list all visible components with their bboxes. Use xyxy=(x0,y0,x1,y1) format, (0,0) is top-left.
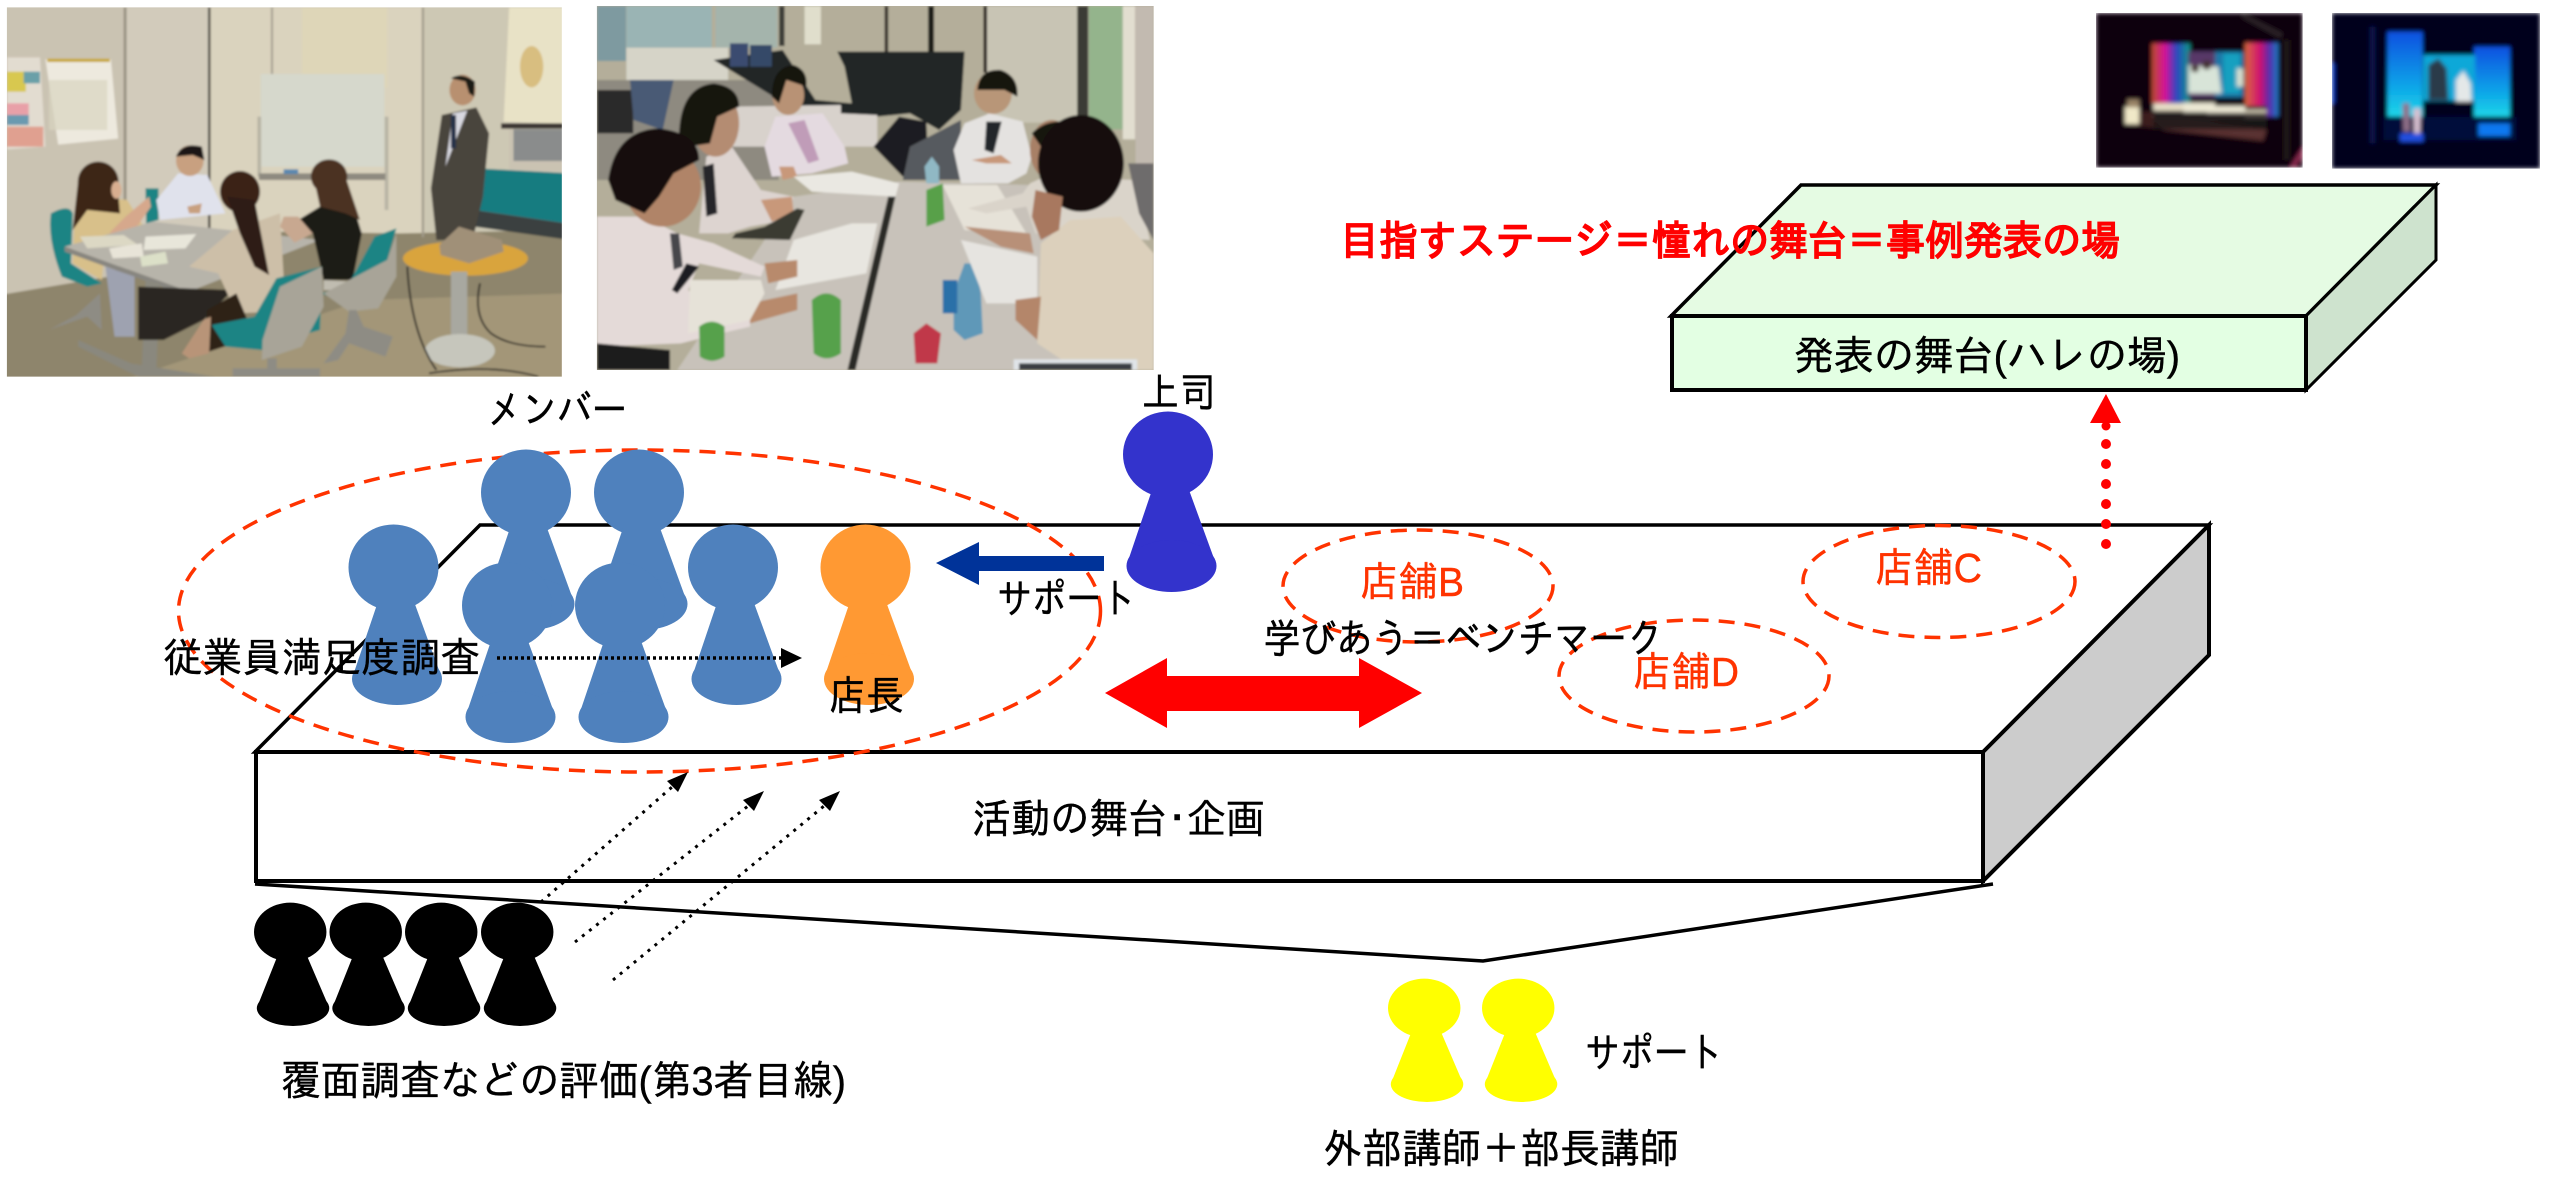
member pawns xyxy=(348,450,782,743)
dotted arrows: third-party evaluation xyxy=(541,772,840,980)
store D xyxy=(1559,620,1829,732)
label: lecturers: 外部講師＋部長講師 xyxy=(1323,1126,1679,1172)
label: presentation stage: 発表の舞台(ハレの場) xyxy=(1794,333,2180,379)
store C xyxy=(1803,526,2075,638)
arrow: boss supports manager xyxy=(936,542,1104,585)
label: benchmark: 学びあう＝ベンチマーク xyxy=(1264,616,1663,662)
arrow: mutual benchmark xyxy=(1105,658,1422,728)
label: support from lecturers: サポート xyxy=(1585,1030,1723,1076)
label: employee satisfaction survey: 従業員満足度調査 xyxy=(163,635,480,681)
dotted arrow: employee survey xyxy=(497,648,802,668)
photo: meeting of men in white shirts around a table xyxy=(590,0,1160,385)
label: boss: 上司 xyxy=(1142,370,1216,416)
third-party evaluator pawns xyxy=(254,903,556,1026)
photo: stage with blue curtains xyxy=(2332,13,2540,169)
label: members: メンバー xyxy=(487,387,627,433)
heading: target stage: 目指すステージ＝憧れの舞台＝事例発表の場 xyxy=(1340,218,2120,264)
green presentation stage xyxy=(1671,185,2436,390)
store C: 店舗C xyxy=(1875,545,1982,591)
dotted arrow: stage aspiration xyxy=(2090,394,2121,549)
photo: stage with rainbow curtains xyxy=(2096,13,2303,168)
store manager pawn xyxy=(820,524,914,705)
store B xyxy=(1283,530,1553,642)
store B: 店舗B xyxy=(1360,559,1464,605)
label: support from boss: サポート xyxy=(997,576,1136,622)
label: activity stage: 活動の舞台･企画 xyxy=(972,796,1265,842)
label: store manager: 店長 xyxy=(829,673,904,719)
support bracket line under the stage xyxy=(255,884,1993,961)
store D: 店舗D xyxy=(1633,649,1739,695)
external lecturer pawns xyxy=(1388,979,1557,1102)
dashed ellipse: own store team xyxy=(178,450,1100,772)
white activity stage xyxy=(255,525,2209,881)
label: third-party evaluation: 覆面調査などの評価(第3者目線) xyxy=(281,1058,846,1104)
boss pawn xyxy=(1123,412,1216,592)
photo: workshop room with five people xyxy=(0,0,570,385)
